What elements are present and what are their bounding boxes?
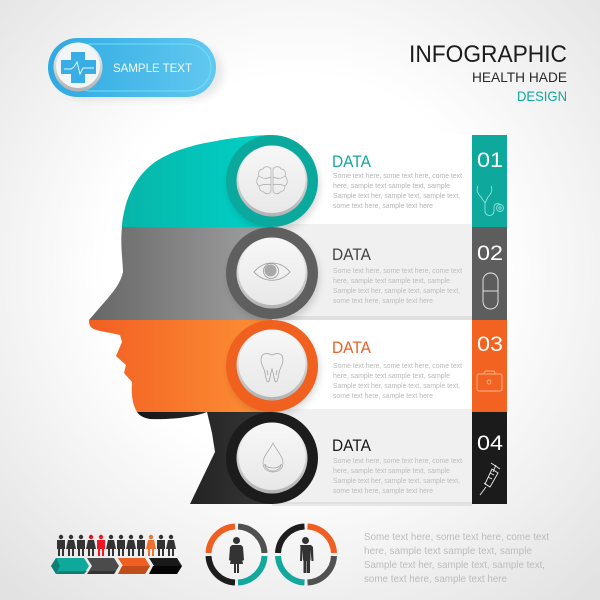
- button: sample text: [48, 38, 223, 100]
- icon: man: [300, 537, 314, 573]
- panel: row 4: DATA: [332, 436, 372, 455]
- panel: row 3: Sample text her, sample text, sample text,: [333, 381, 460, 390]
- panel: row 3: [272, 320, 507, 414]
- text block: bottom right: Some text here, some text here, come text: [364, 532, 549, 543]
- panel: row 3: 03: [477, 333, 503, 356]
- icon: syringe: [480, 463, 500, 495]
- icon: first aid kit: [477, 371, 502, 391]
- panel: row 3: Some text here, some text here, come text: [333, 361, 462, 370]
- panel: row 4: Sample text her, sample text, sample text,: [333, 476, 460, 485]
- title: INFOGRAPHIC: [409, 41, 567, 68]
- panel: row 1: Sample text her, sample text, sample text,: [333, 191, 460, 200]
- person icons: [57, 535, 176, 556]
- panel: row 4: 04: [477, 432, 503, 455]
- text block: bottom right: Sample text her, sample text, sample text,: [364, 560, 545, 571]
- panel: row 2: some text here, sample text here: [333, 296, 433, 305]
- panel: row 4: [272, 412, 507, 506]
- panel: row 1: Some text here, some text here, come text: [333, 171, 462, 180]
- icon: brain: [257, 167, 287, 194]
- circle: gray with eye icon: [226, 227, 319, 323]
- icon: woman: [229, 537, 244, 573]
- head: gray band: [89, 227, 272, 320]
- panel: row 3: here, sample text sample text, sample: [333, 371, 450, 380]
- ring: female: [208, 526, 264, 582]
- title: [409, 41, 567, 104]
- button: sample text: SAMPLE TEXT: [113, 61, 193, 75]
- panel: row 2: [272, 227, 507, 321]
- icon: tooth: [261, 354, 283, 382]
- circle: teal with brain icon: [226, 135, 319, 231]
- text block: bottom right: [364, 532, 549, 585]
- icon: eye: [254, 263, 290, 280]
- text block: bottom right: here, sample text sample text, sample: [364, 546, 532, 557]
- circle: orange with tooth icon: [226, 320, 319, 415]
- panel: row 3: DATA: [332, 338, 372, 357]
- panel: row 1: 01: [477, 149, 503, 172]
- panel: row 4: some text here, sample text here: [333, 486, 433, 495]
- panel: row 4: Some text here, some text here, come text: [333, 456, 462, 465]
- icon: pill: [483, 273, 498, 309]
- icon: stethoscope: [477, 186, 504, 216]
- head: chin and neck black band: [137, 412, 272, 504]
- panel: row 2: Sample text her, sample text, sample text,: [333, 286, 460, 295]
- ring: male: [278, 526, 334, 582]
- panel: row 2: here, sample text sample text, sample: [333, 276, 450, 285]
- panel: row 1: here, sample text sample text, sample: [333, 181, 450, 190]
- panel: row 2: 02: [477, 242, 503, 265]
- head: teal band: [122, 135, 272, 227]
- panel: row 1: DATA: [332, 152, 372, 171]
- panel: row 3: some text here, sample text here: [333, 391, 433, 400]
- text block: bottom right: some text here, sample text here: [364, 574, 507, 585]
- head silhouette: [89, 135, 272, 504]
- title: DESIGN: [517, 88, 567, 104]
- panel: row 1: some text here, sample text here: [333, 201, 433, 210]
- panel: row 1: [272, 135, 507, 229]
- title: HEALTH HADE: [472, 69, 567, 85]
- panel: row 2: Some text here, some text here, come text: [333, 266, 462, 275]
- head: orange band: [89, 320, 272, 412]
- arrow bar: [51, 558, 182, 574]
- people row: [51, 535, 182, 574]
- circle: black with drop icon: [226, 412, 318, 504]
- panel: row 4: here, sample text sample text, sample: [333, 466, 450, 475]
- icon: water drop: [263, 443, 283, 472]
- panel: row 2: DATA: [332, 245, 372, 264]
